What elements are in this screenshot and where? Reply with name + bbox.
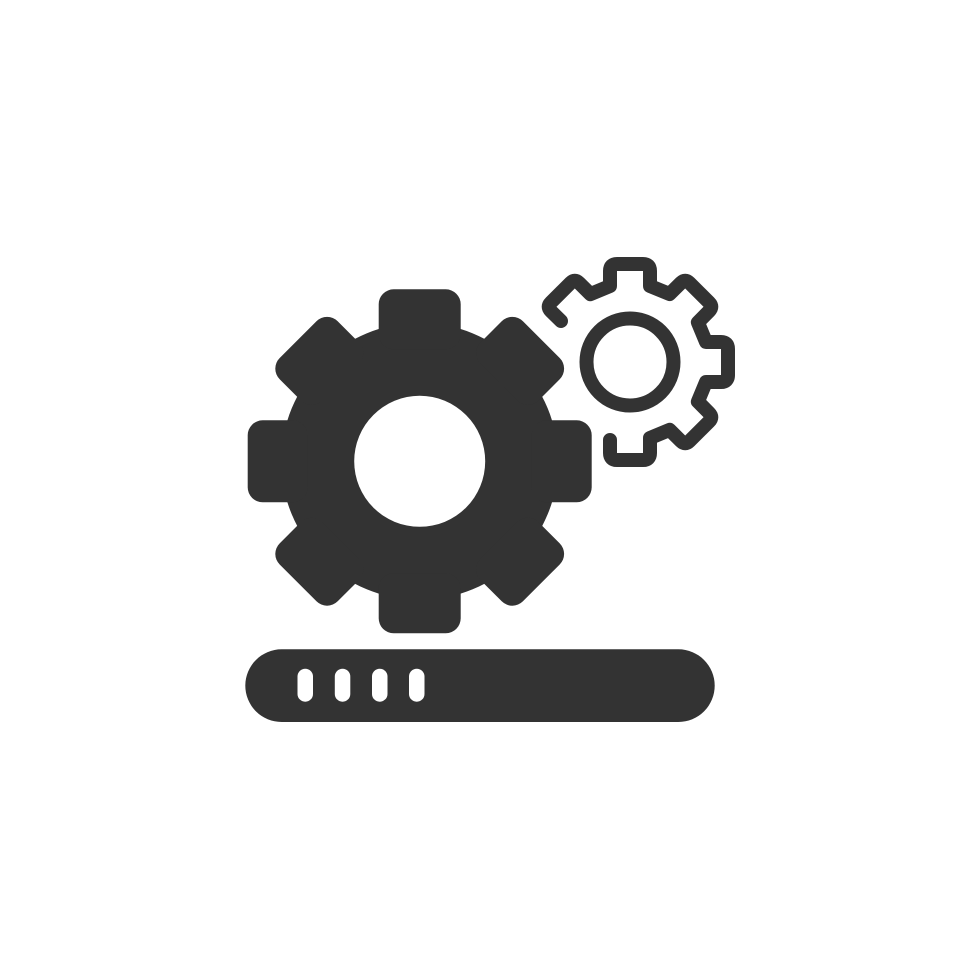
progress indicator pills <box>298 669 424 702</box>
icon: small outlined gear <box>549 264 728 460</box>
icon: large solid gear <box>248 289 592 633</box>
progress bar <box>245 649 715 722</box>
